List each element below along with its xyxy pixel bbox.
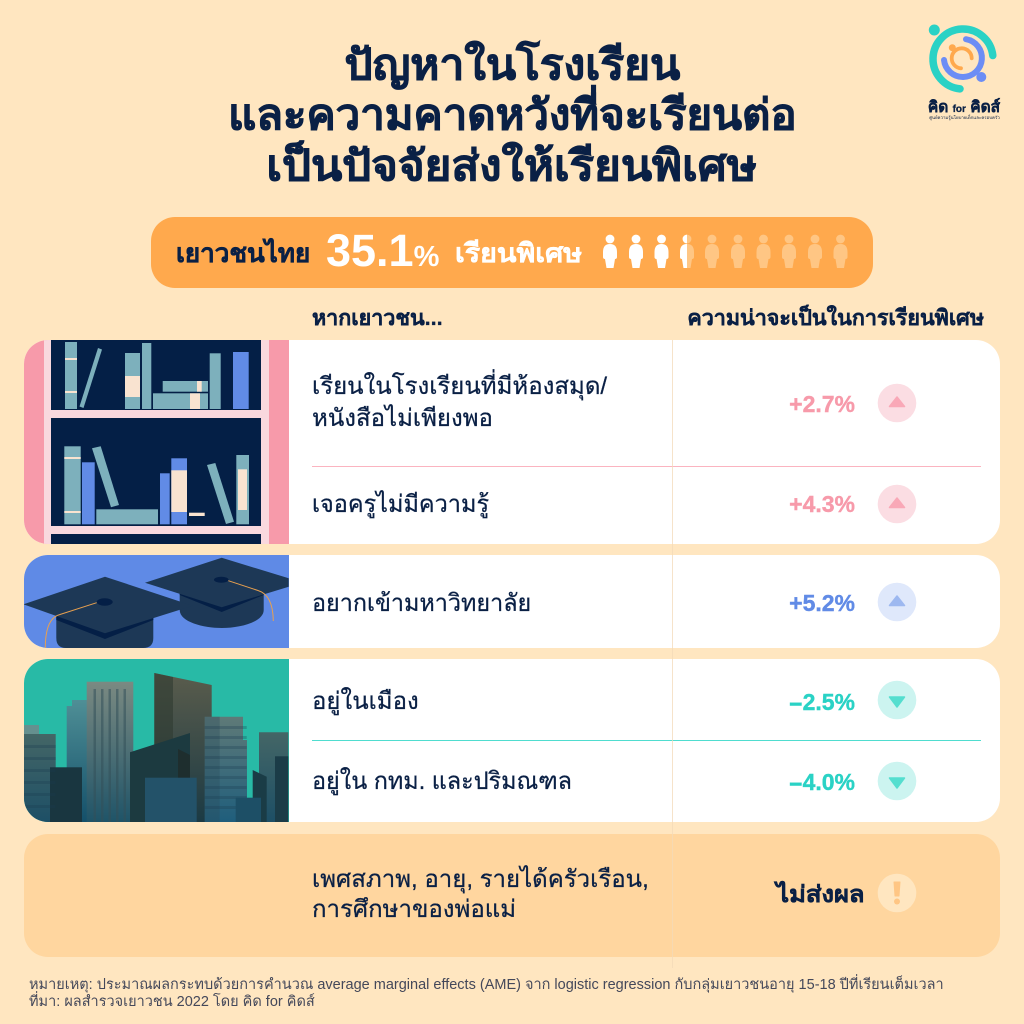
value: +2.7%: +2.7% [789,391,855,417]
value: +5.2%: +5.2% [789,590,855,616]
value: -2.5%: 2.5% [803,689,855,715]
panel: university [24,555,1000,648]
panel: urban [24,659,1000,822]
icon: up pink [878,384,916,422]
title [228,40,796,189]
stat: 35.1% [326,225,439,276]
label: tutoring: เรียนพิเศษ [455,238,582,268]
value: -4.0%: 4.0% [803,769,855,795]
row: demographics: การศึกษาของพ่อแม่ [312,896,516,923]
row: city: อยู่ในเมือง [312,688,419,715]
column heading: if youth: หากเยาวชน... [312,306,443,330]
summary pill [151,217,873,288]
icon: up pink [878,484,916,524]
row: library: เรียนในโรงเรียนที่มีห้องสมุด/ [312,373,607,400]
title: ปัญหาในโรงเรียน [344,41,680,88]
title: และความคาดหวังที่จะเรียนต่อ [228,91,796,138]
label: youth: เยาวชนไทย [176,238,310,268]
icon: warning [878,874,916,912]
value: +4.3%: +4.3% [789,491,855,517]
illustration: graduation caps [24,555,289,648]
row: demographics [312,865,649,923]
logo: ศูนย์ความรู้นโยบายเด็กและครอบครัว [929,113,1000,121]
panel: school [24,340,1000,544]
row: Bangkok: อยู่ใน กทม. และปริมณฑล [312,768,572,795]
illustration: bookshelf [24,340,289,544]
row: library [312,369,608,432]
row: library: หนังสือไม่เพียงพอ [312,405,493,432]
title: เป็นปัจจัยส่งให้เรียนพิเศษ [267,142,757,189]
value: -4.0%: - [788,769,803,795]
row: demographics: เพศสภาพ, อายุ, รายได้ครัวเรือน, [312,866,649,893]
footnote: หมายเหตุ: ประมาณผลกระทบด้วยการคำนวณ average marginal effects (AME) จาก logistic regression กับกลุ่มเยาวชนอายุ 15-18 ปีที่เรียนเต็มเวลา [29,977,944,993]
logo: คิด for คิดส์ [928,98,1001,116]
footnote [29,974,944,1010]
icon: up blue [878,582,916,622]
column heading: probability: ความน่าจะเป็นในการเรียนพิเศษ [687,306,984,330]
logo [928,24,1001,121]
illustration: city skyline [24,659,289,822]
pictogram [603,234,848,268]
value: no effect: ไม่ส่งผล [777,881,865,907]
value: -2.5%: - [788,689,803,715]
row: university: อยากเข้ามหาวิทยาลัย [312,590,531,617]
icon: down teal [878,762,916,800]
row: teacher: เจอครูไม่มีความรู้ [312,491,489,518]
icon: down teal [878,680,916,720]
panel: no effect [24,834,1000,957]
footnote: ที่มา: ผลสำรวจเยาวชน 2022 โดย คิด for คิดส์ [29,994,315,1010]
